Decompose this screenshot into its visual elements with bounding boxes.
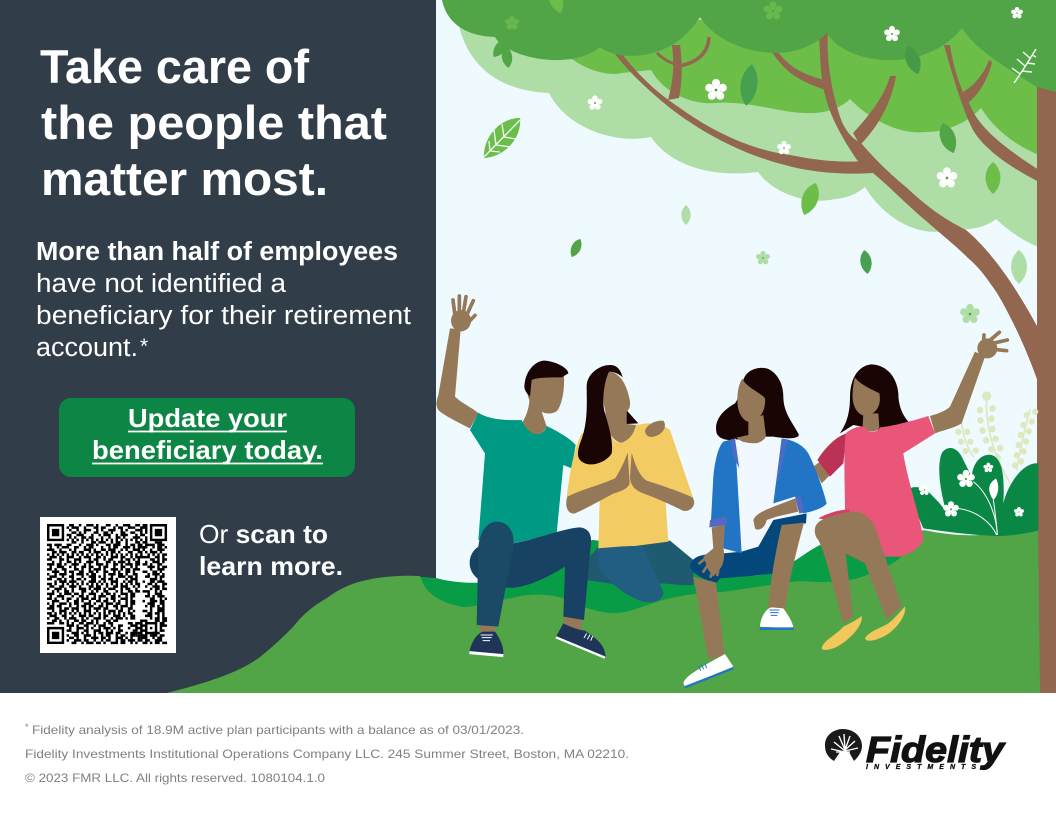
legs xyxy=(693,523,804,659)
Fidelity logo xyxy=(825,729,1006,771)
woman yellow: hair back xyxy=(623,407,638,424)
arm and hands xyxy=(699,498,798,577)
person: man in teal shirt and woman in yellow top xyxy=(436,296,694,658)
footnote text: * xyxy=(25,722,29,732)
logo: investments: INVESTMENTS xyxy=(866,764,976,771)
title xyxy=(40,40,387,205)
person: woman in pink dress xyxy=(813,332,1007,650)
legs xyxy=(815,511,902,623)
pink dress xyxy=(844,416,935,557)
jacket xyxy=(709,438,827,553)
man: hand on shoulder xyxy=(645,421,665,437)
neck xyxy=(737,415,766,444)
man: raised arm xyxy=(436,296,478,428)
face xyxy=(737,378,765,422)
yellow flats xyxy=(822,607,905,650)
logo: sunburst mark xyxy=(825,729,862,761)
canopy: light layer xyxy=(458,0,1039,247)
call to action button: beneficiary today. xyxy=(92,435,323,465)
woman yellow: face xyxy=(603,371,630,414)
body text: have not identified a xyxy=(36,270,287,298)
title: Take care of xyxy=(40,40,309,93)
call to action button: Update your xyxy=(128,403,287,433)
woman yellow: front thigh xyxy=(598,546,663,602)
scan prompt xyxy=(199,519,343,581)
man: hair xyxy=(524,361,568,397)
logo: wordmark: Fidelity xyxy=(866,729,1006,770)
footnote text: © 2023 FMR LLC. All rights reserved. 1080104.1.0 xyxy=(25,771,325,785)
pale vines xyxy=(958,391,1035,483)
hillside ground xyxy=(167,528,1040,693)
dress hem under thigh xyxy=(818,509,850,523)
hair back xyxy=(840,364,910,433)
neck xyxy=(863,413,879,431)
blossoms xyxy=(505,1,1023,323)
bush stems and flowers xyxy=(919,463,1024,535)
back hill xyxy=(420,540,905,640)
falling leaves xyxy=(476,0,1036,284)
title: the people that xyxy=(41,96,387,149)
front ground xyxy=(167,528,1040,693)
woman yellow: back trousers xyxy=(587,541,693,587)
scan prompt: learn more. xyxy=(199,551,343,581)
body text: account. xyxy=(36,334,138,362)
man: trousers xyxy=(470,522,591,627)
call to action button xyxy=(59,398,355,477)
background: left panel xyxy=(0,0,436,693)
back arm xyxy=(813,462,830,483)
white sneakers xyxy=(683,607,794,687)
face xyxy=(853,377,880,416)
scan prompt: Or scan to xyxy=(199,519,328,549)
man: shoes xyxy=(469,623,606,658)
raised arm and hand xyxy=(930,332,1007,433)
footnote text xyxy=(25,722,629,785)
footnote text: Fidelity Investments Institutional Operations Company LLC. 245 Summer Street, Boston, MA 02210. xyxy=(25,747,629,761)
man: neck and head xyxy=(522,375,564,434)
man: ankles xyxy=(480,615,583,633)
QR code xyxy=(40,517,176,653)
body text: More than half of employees xyxy=(36,238,398,266)
canopy: dark layer xyxy=(442,0,1056,92)
background: sky xyxy=(436,0,1056,693)
woman yellow: long hair xyxy=(578,365,623,464)
man: teal shirt xyxy=(470,413,576,543)
footnote text: Fidelity analysis of 18.9M active plan participants with a balance as of 03/01/2023. xyxy=(32,723,524,737)
body text: * xyxy=(140,335,148,358)
body text: beneficiary for their retirement xyxy=(36,302,411,330)
person: woman in blue jacket xyxy=(683,368,827,687)
shorts xyxy=(690,513,807,583)
crimson sleeve xyxy=(817,433,847,477)
woman yellow: neck xyxy=(605,408,636,443)
green bush xyxy=(907,448,1038,536)
footer band xyxy=(0,693,1056,816)
woman yellow: top xyxy=(567,423,693,551)
white top xyxy=(735,438,782,548)
foliage and bush beside the trunk xyxy=(907,391,1038,536)
tree trunk and branches xyxy=(612,33,1056,693)
tree illustration xyxy=(442,0,1056,693)
title: matter most. xyxy=(41,152,328,205)
woman yellow: arms with palms together xyxy=(566,453,694,513)
canopy: mid layer xyxy=(560,20,1039,155)
hair xyxy=(716,368,799,440)
body text xyxy=(36,238,411,362)
